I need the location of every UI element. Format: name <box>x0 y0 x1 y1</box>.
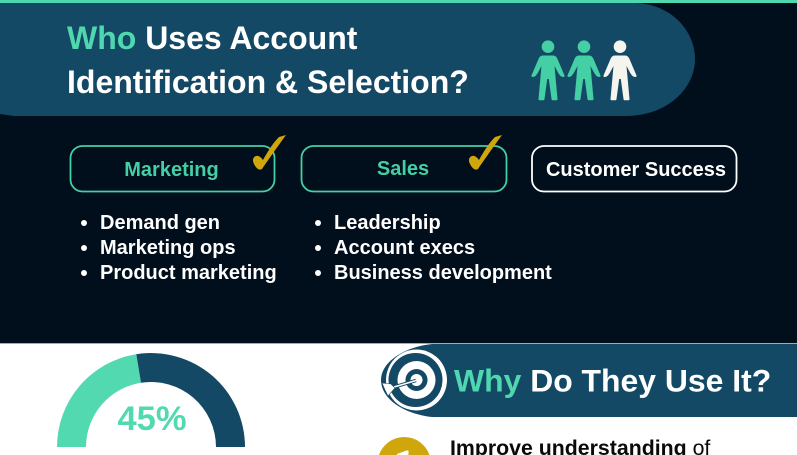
person 1 <box>531 40 565 100</box>
background top section <box>0 0 797 343</box>
option: marketing <box>70 146 274 192</box>
icon: target with arrow <box>382 350 447 410</box>
lower white panel <box>0 343 797 455</box>
why banner <box>381 344 797 417</box>
icon: marketing check <box>253 135 286 170</box>
list: marketing roles: Demand gen <box>100 212 220 234</box>
list: sales roles <box>315 212 552 284</box>
option: sales: Sales <box>377 158 429 180</box>
icon: three people <box>531 40 637 100</box>
option: marketing: Marketing <box>124 159 219 181</box>
person 3 <box>603 40 637 100</box>
list: marketing roles: Marketing ops <box>100 237 236 259</box>
option: customer success: Customer Success <box>546 159 726 181</box>
top accent bar <box>0 0 797 3</box>
gauge value: 45% <box>117 400 187 438</box>
list: sales roles: Account execs <box>334 237 475 259</box>
title: Who Uses Account <box>67 20 358 56</box>
list: sales roles: Business development <box>334 262 552 284</box>
header banner <box>0 3 695 116</box>
number badge <box>379 437 430 455</box>
why heading: Why Do They Use It? <box>454 362 771 398</box>
title line 2: Identification & Selection? <box>67 64 469 100</box>
gauge chart <box>57 353 245 447</box>
person 2 <box>567 40 601 100</box>
list: marketing roles <box>81 212 277 284</box>
icon: sales check <box>469 135 502 170</box>
list: sales roles: Leadership <box>334 212 441 234</box>
option: sales <box>302 146 506 192</box>
list: marketing roles: Product marketing <box>100 262 277 284</box>
option: customer success <box>532 146 736 192</box>
